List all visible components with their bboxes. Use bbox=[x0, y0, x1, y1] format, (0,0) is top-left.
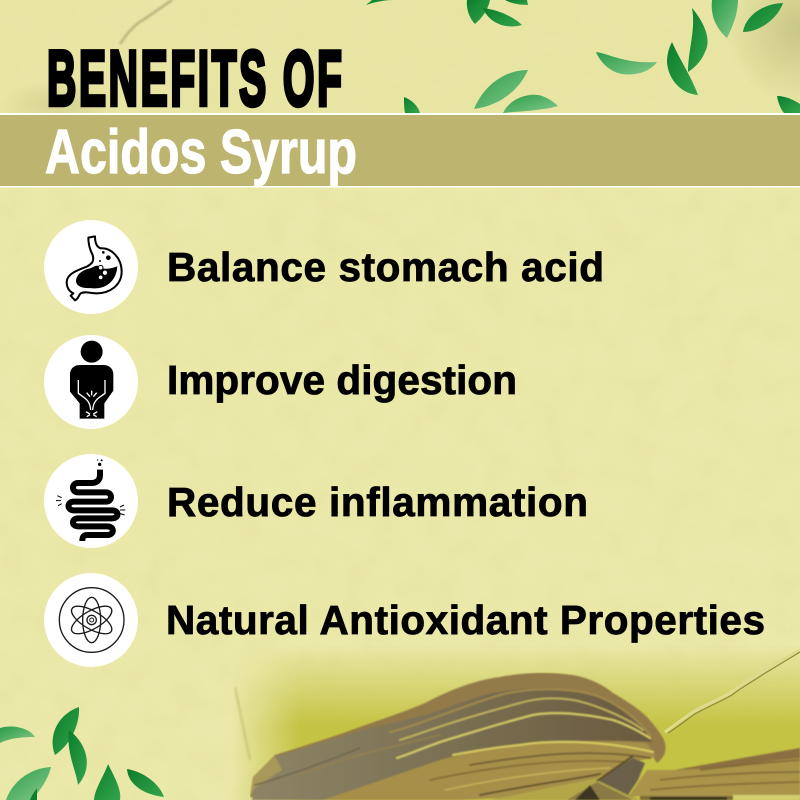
book lower strip bbox=[490, 776, 640, 800]
book left page block: brown cover edge bbox=[250, 673, 666, 800]
book left page block: grey fore-edge bbox=[252, 688, 652, 800]
item 4: natural antioxidant properties bbox=[44, 573, 765, 667]
banner: Acidos Syrup: Acidos Syrup bbox=[45, 118, 357, 187]
item 3: reduce inflammation bbox=[44, 454, 588, 548]
leaves: bottom left cluster bbox=[0, 707, 164, 800]
title: BENEFITS OF: BENEFITS OF bbox=[47, 36, 342, 123]
icon: stomach bbox=[44, 220, 138, 314]
label: improve digestion: Improve digestion bbox=[167, 357, 517, 403]
label: balance stomach acid: Balance stomach acid bbox=[167, 244, 604, 290]
book spine bbox=[597, 758, 645, 795]
book lower gold pages bbox=[323, 741, 656, 800]
banner: Acidos Syrup bbox=[0, 113, 800, 188]
illustration: open book bbox=[250, 673, 800, 800]
book right page block bbox=[628, 748, 800, 797]
item 2: improve digestion bbox=[44, 335, 517, 429]
label: natural antioxidant properties: Natural Antioxidant Properties bbox=[166, 597, 765, 643]
icon: person holding stomach bbox=[44, 335, 138, 429]
label: reduce inflammation: Reduce inflammation bbox=[167, 479, 588, 525]
item 1: balance stomach acid bbox=[44, 220, 604, 314]
icon: atom bbox=[44, 573, 138, 667]
icon: intestines bbox=[44, 454, 138, 548]
leaves: top right cluster bbox=[366, 0, 800, 113]
